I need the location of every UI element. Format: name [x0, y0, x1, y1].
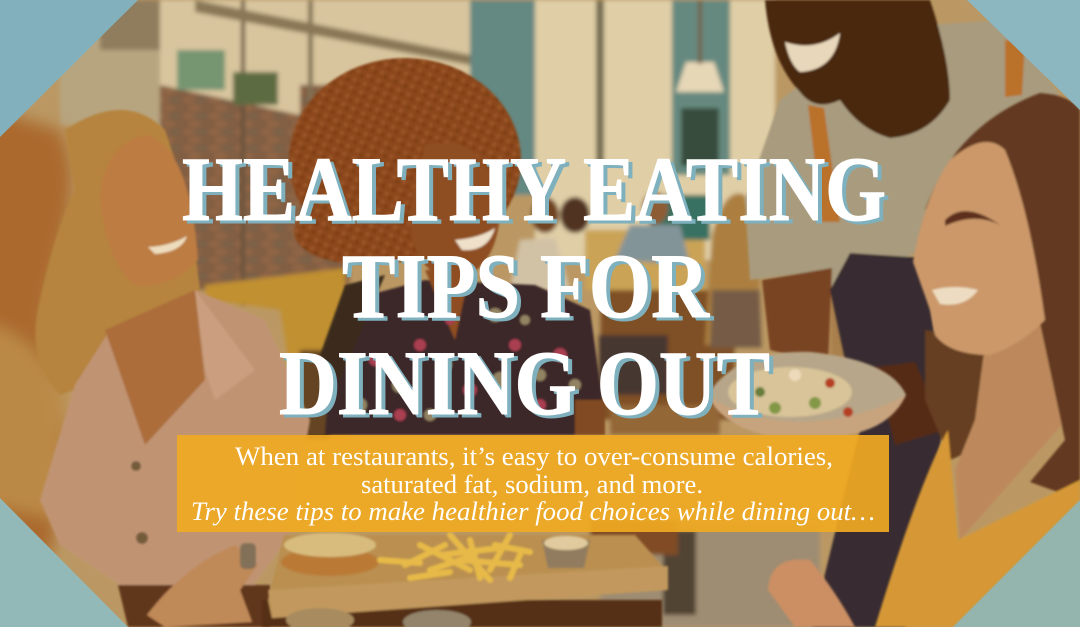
right woman: [768, 93, 1080, 627]
corner: bottom right: [953, 500, 1080, 627]
title line faces: TIPS FOR: [342, 235, 710, 337]
title line faces: HEALTHY EATING: [182, 138, 886, 240]
corner: bottom left: [0, 498, 128, 627]
title line shadows: DINING OUT: [283, 335, 774, 437]
title line shadows: TIPS FOR: [346, 238, 714, 340]
table edge: [118, 585, 270, 627]
title: [182, 138, 890, 437]
left hand and watch: [147, 545, 258, 627]
intro text: saturated fat, sodium, and more.: [361, 469, 703, 499]
food bowl: [708, 352, 906, 436]
lower floor: [600, 520, 820, 627]
title line shadows: [186, 141, 890, 437]
left woman: [36, 110, 310, 627]
left blurred foreground figure: [0, 100, 71, 560]
intro text: When at restaurants, it’s easy to over-consume calories,: [235, 441, 833, 471]
intro band: [177, 435, 889, 532]
title line shadows: HEALTHY EATING: [186, 141, 890, 243]
intro text: Try these tips to make healthier food choices while dining out…: [191, 496, 875, 526]
title line faces: [182, 138, 886, 434]
right hand: [768, 559, 855, 627]
corner: top left: [0, 0, 138, 137]
center woman: [289, 58, 605, 435]
food board: [262, 533, 668, 627]
corner: top right: [967, 0, 1080, 110]
waiter: [745, 0, 1060, 627]
title line faces: DINING OUT: [279, 332, 770, 434]
intro text: [191, 441, 875, 526]
background diners: [560, 197, 590, 233]
